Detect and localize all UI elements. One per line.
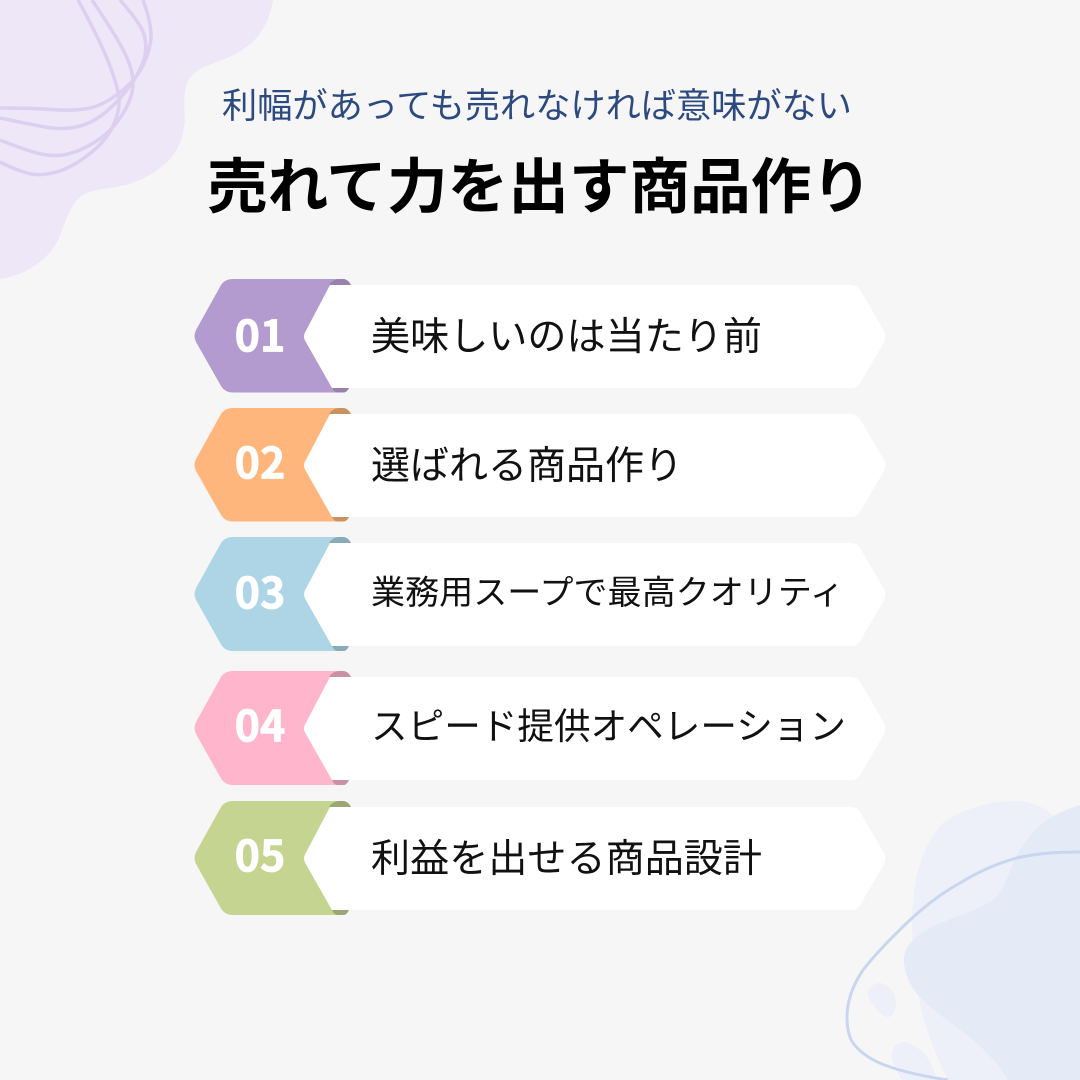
number tab 02	[194, 408, 351, 522]
number tab 04	[194, 671, 351, 785]
label card 05	[304, 807, 886, 910]
number tab 04: 04	[235, 692, 285, 754]
number tab 05	[194, 801, 351, 915]
item 03	[194, 537, 886, 651]
item 04	[194, 671, 886, 785]
label card 05: 利益を出せる商品設計	[371, 838, 762, 881]
item 02	[194, 408, 886, 522]
label card 03	[304, 543, 886, 646]
number tab 03: 03	[235, 560, 285, 622]
number tab 03	[194, 537, 351, 651]
title: 売れて力を出す商品作り	[207, 154, 872, 221]
label card 02: 選ばれる商品作り	[371, 445, 683, 488]
decoration: bottom-right blue blobs	[847, 801, 1080, 1080]
number tab 01: 01	[235, 302, 285, 364]
label card 02	[304, 414, 886, 517]
number tab 05: 05	[235, 822, 285, 884]
label card 04: スピード提供オペレーション	[371, 706, 846, 747]
item 01	[194, 279, 886, 392]
subtitle: 利幅があっても売れなければ意味がない	[222, 87, 852, 126]
decoration: top-left purple blob	[0, 0, 273, 279]
number tab 02: 02	[235, 430, 285, 492]
label card 01	[304, 285, 886, 388]
label card 04	[304, 677, 886, 780]
number tab 01	[194, 279, 351, 392]
label card 03: 業務用スープで最高クオリティ	[371, 575, 844, 612]
label card 01: 美味しいのは当たり前	[371, 316, 762, 359]
item 05	[194, 801, 886, 915]
